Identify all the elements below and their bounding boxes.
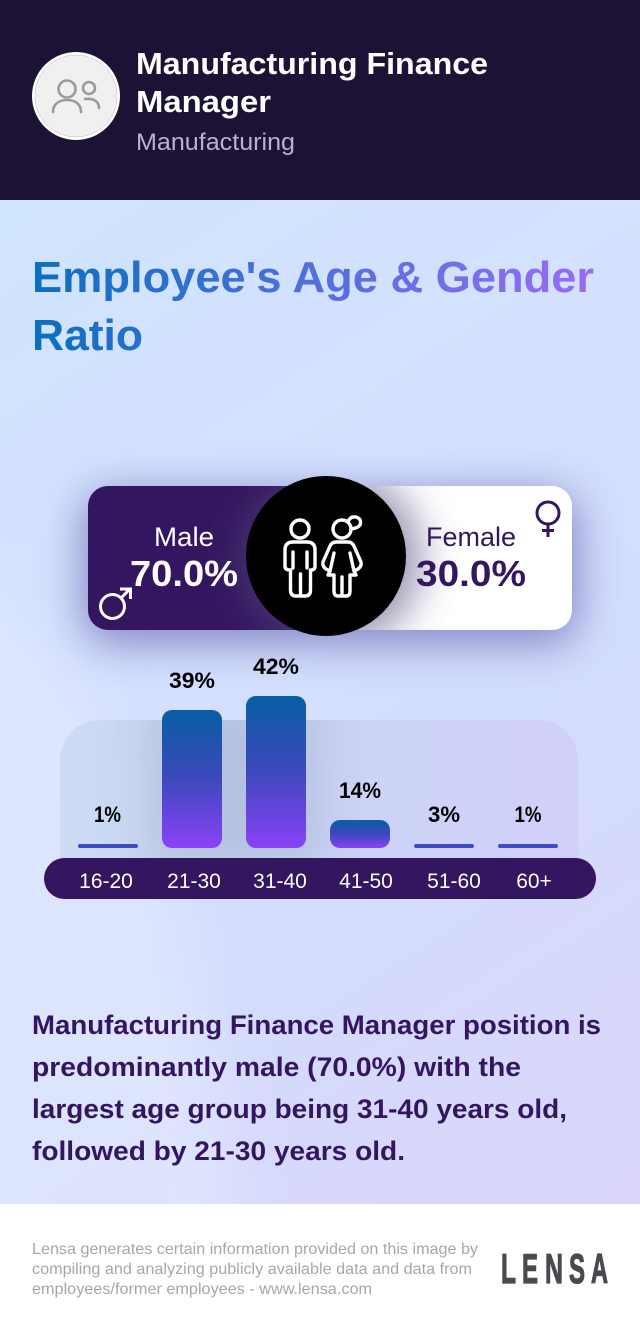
female percentage: 30.0% <box>416 553 526 594</box>
logo: E <box>522 1245 538 1292</box>
gender ratio card <box>84 468 576 648</box>
male label: Male <box>154 522 214 552</box>
disclaimer: Lensa generates certain information provided on this image by <box>32 1241 478 1258</box>
job title: Manufacturing Finance <box>136 46 488 81</box>
disclaimer: employees/former employees - www.lensa.com <box>32 1281 372 1298</box>
summary text: followed by 21-30 years old. <box>32 1136 405 1166</box>
logo <box>501 1245 608 1292</box>
industry: Manufacturing <box>136 129 295 156</box>
value labels: 3% <box>428 802 460 827</box>
age labels: 51-60 <box>427 870 481 893</box>
value labels: 42% <box>253 654 299 679</box>
value labels: 39% <box>169 668 215 693</box>
job title: Manager <box>136 84 271 119</box>
icon: people avatar <box>32 52 120 140</box>
value labels <box>94 654 542 827</box>
center circle with people icon <box>246 476 406 636</box>
age labels: 41-50 <box>339 870 393 893</box>
logo: N <box>545 1245 563 1292</box>
age distribution bar chart <box>44 654 596 899</box>
bars <box>78 696 558 848</box>
logo: A <box>591 1245 608 1292</box>
female label: Female <box>426 522 516 552</box>
icon: female symbol <box>537 502 559 537</box>
disclaimer: compiling and analyzing publicly available data and data from <box>32 1261 472 1278</box>
summary text: predominantly male (70.0%) with the <box>32 1052 521 1082</box>
summary text: Manufacturing Finance Manager position is <box>32 1010 601 1040</box>
age labels <box>79 870 552 893</box>
heading: Ratio <box>32 311 143 360</box>
footer <box>0 1204 640 1332</box>
logo: S <box>569 1245 585 1292</box>
age distribution backdrop <box>60 720 578 858</box>
age labels: 21-30 <box>167 870 221 893</box>
heading: Employee's Age & Gender <box>32 253 594 302</box>
age axis band <box>44 858 596 899</box>
age labels: 31-40 <box>253 870 307 893</box>
male percentage: 70.0% <box>130 553 238 594</box>
logo: L <box>501 1245 516 1292</box>
icon: male symbol <box>100 589 130 618</box>
value labels: 1% <box>94 802 121 827</box>
age labels: 16-20 <box>79 870 133 893</box>
header band <box>0 0 640 200</box>
value labels: 1% <box>514 802 542 827</box>
value labels: 14% <box>339 778 381 803</box>
age labels: 60+ <box>516 870 552 893</box>
summary text: largest age group being 31-40 years old, <box>32 1094 567 1124</box>
